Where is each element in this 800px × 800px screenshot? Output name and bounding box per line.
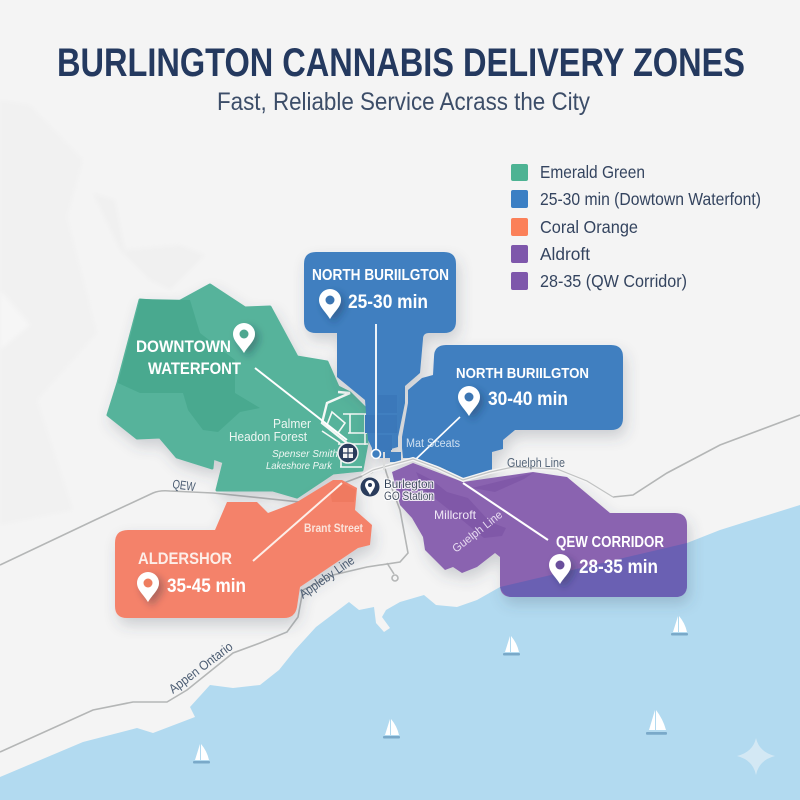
travel time: 30-40 min [488,389,568,410]
pin [137,572,159,602]
label: Downtown Waterfont: DOWNTOWN [136,337,231,356]
pin [458,386,480,416]
label: NORTH BURIILGTON [312,267,449,284]
road label: Appleby Line: Appleby Line [296,552,357,601]
hub marker: Spenser Smith [338,443,358,463]
subtitle: Fast, Reliable Service Acrass the City [217,88,590,116]
zone: QEW Corridor [392,463,687,597]
place labels: Spenser Smith [272,448,338,460]
sailboat [646,710,667,735]
label: NORTH BURIILGTON [456,365,589,382]
pin [549,554,571,584]
pin [319,289,341,319]
legend: coral orange: Coral Orange [540,217,638,237]
road label: Appen Ontario: Appen Ontario [166,639,236,696]
leader line [463,483,548,540]
part over lake [500,543,687,597]
label: ALDERSHOR [138,549,232,568]
legend: Aldroft: Aldroft [540,244,590,264]
place labels [229,417,338,472]
street label: Guelph Line [450,509,505,555]
label: Downtown Waterfont [136,337,242,378]
lake [0,505,800,800]
legend: 28-35: 28-35 (QW Corridor) [540,271,687,291]
place label: Millcroft [434,508,477,522]
GO station label: Burlegton [384,477,434,491]
legend: Aldroft [511,244,590,264]
label: QEW CORRIDOR [556,534,664,551]
sailboat [503,636,520,656]
pin: Downtown Waterfont [233,323,255,353]
place labels: Palmer [273,417,311,431]
label: Downtown Waterfont: WATERFONT [148,359,242,378]
sailboat [671,616,688,636]
zone: North Burlington 25-30 [304,252,456,458]
legend: 25-30 min: 25-30 min (Dowtown Waterfont) [540,189,761,209]
roads [0,415,800,752]
GO station label: GO Station [384,489,434,503]
sailboat [383,719,400,738]
leader line [415,417,460,460]
legend: emerald green: Emerald Green [540,162,645,182]
small block [390,452,401,462]
travel time: 28-35 min [579,557,658,578]
zone: Aldershor [115,480,372,618]
darker patch [330,483,356,502]
GO station marker [360,478,380,496]
leader line [253,483,342,561]
road label: Guelph Line: Guelph Line [507,455,565,470]
sailboat [193,744,210,764]
road label: QEW: QEW [172,477,196,494]
street network [322,392,368,467]
GO station label [384,477,434,503]
place labels: Headon Forest [229,430,307,444]
road overlay [362,452,613,497]
zone: Downtown Waterfont [108,285,368,497]
legend [511,162,761,291]
leader line [255,368,347,440]
place label: Mat Sceats [406,438,460,450]
darker terrain patch [118,299,260,432]
hub marker: line end [372,450,380,458]
travel time: 35-45 min [167,576,246,597]
place labels: Lakeshore Park [266,460,333,472]
zone: North Burlington 30-40 [390,345,623,478]
sparkle [737,738,775,775]
darker blocks [365,395,397,450]
darker terrain [416,472,533,538]
leader line [375,324,377,450]
travel time: 25-30 min [348,292,428,313]
street label: Brant Street [304,523,363,535]
